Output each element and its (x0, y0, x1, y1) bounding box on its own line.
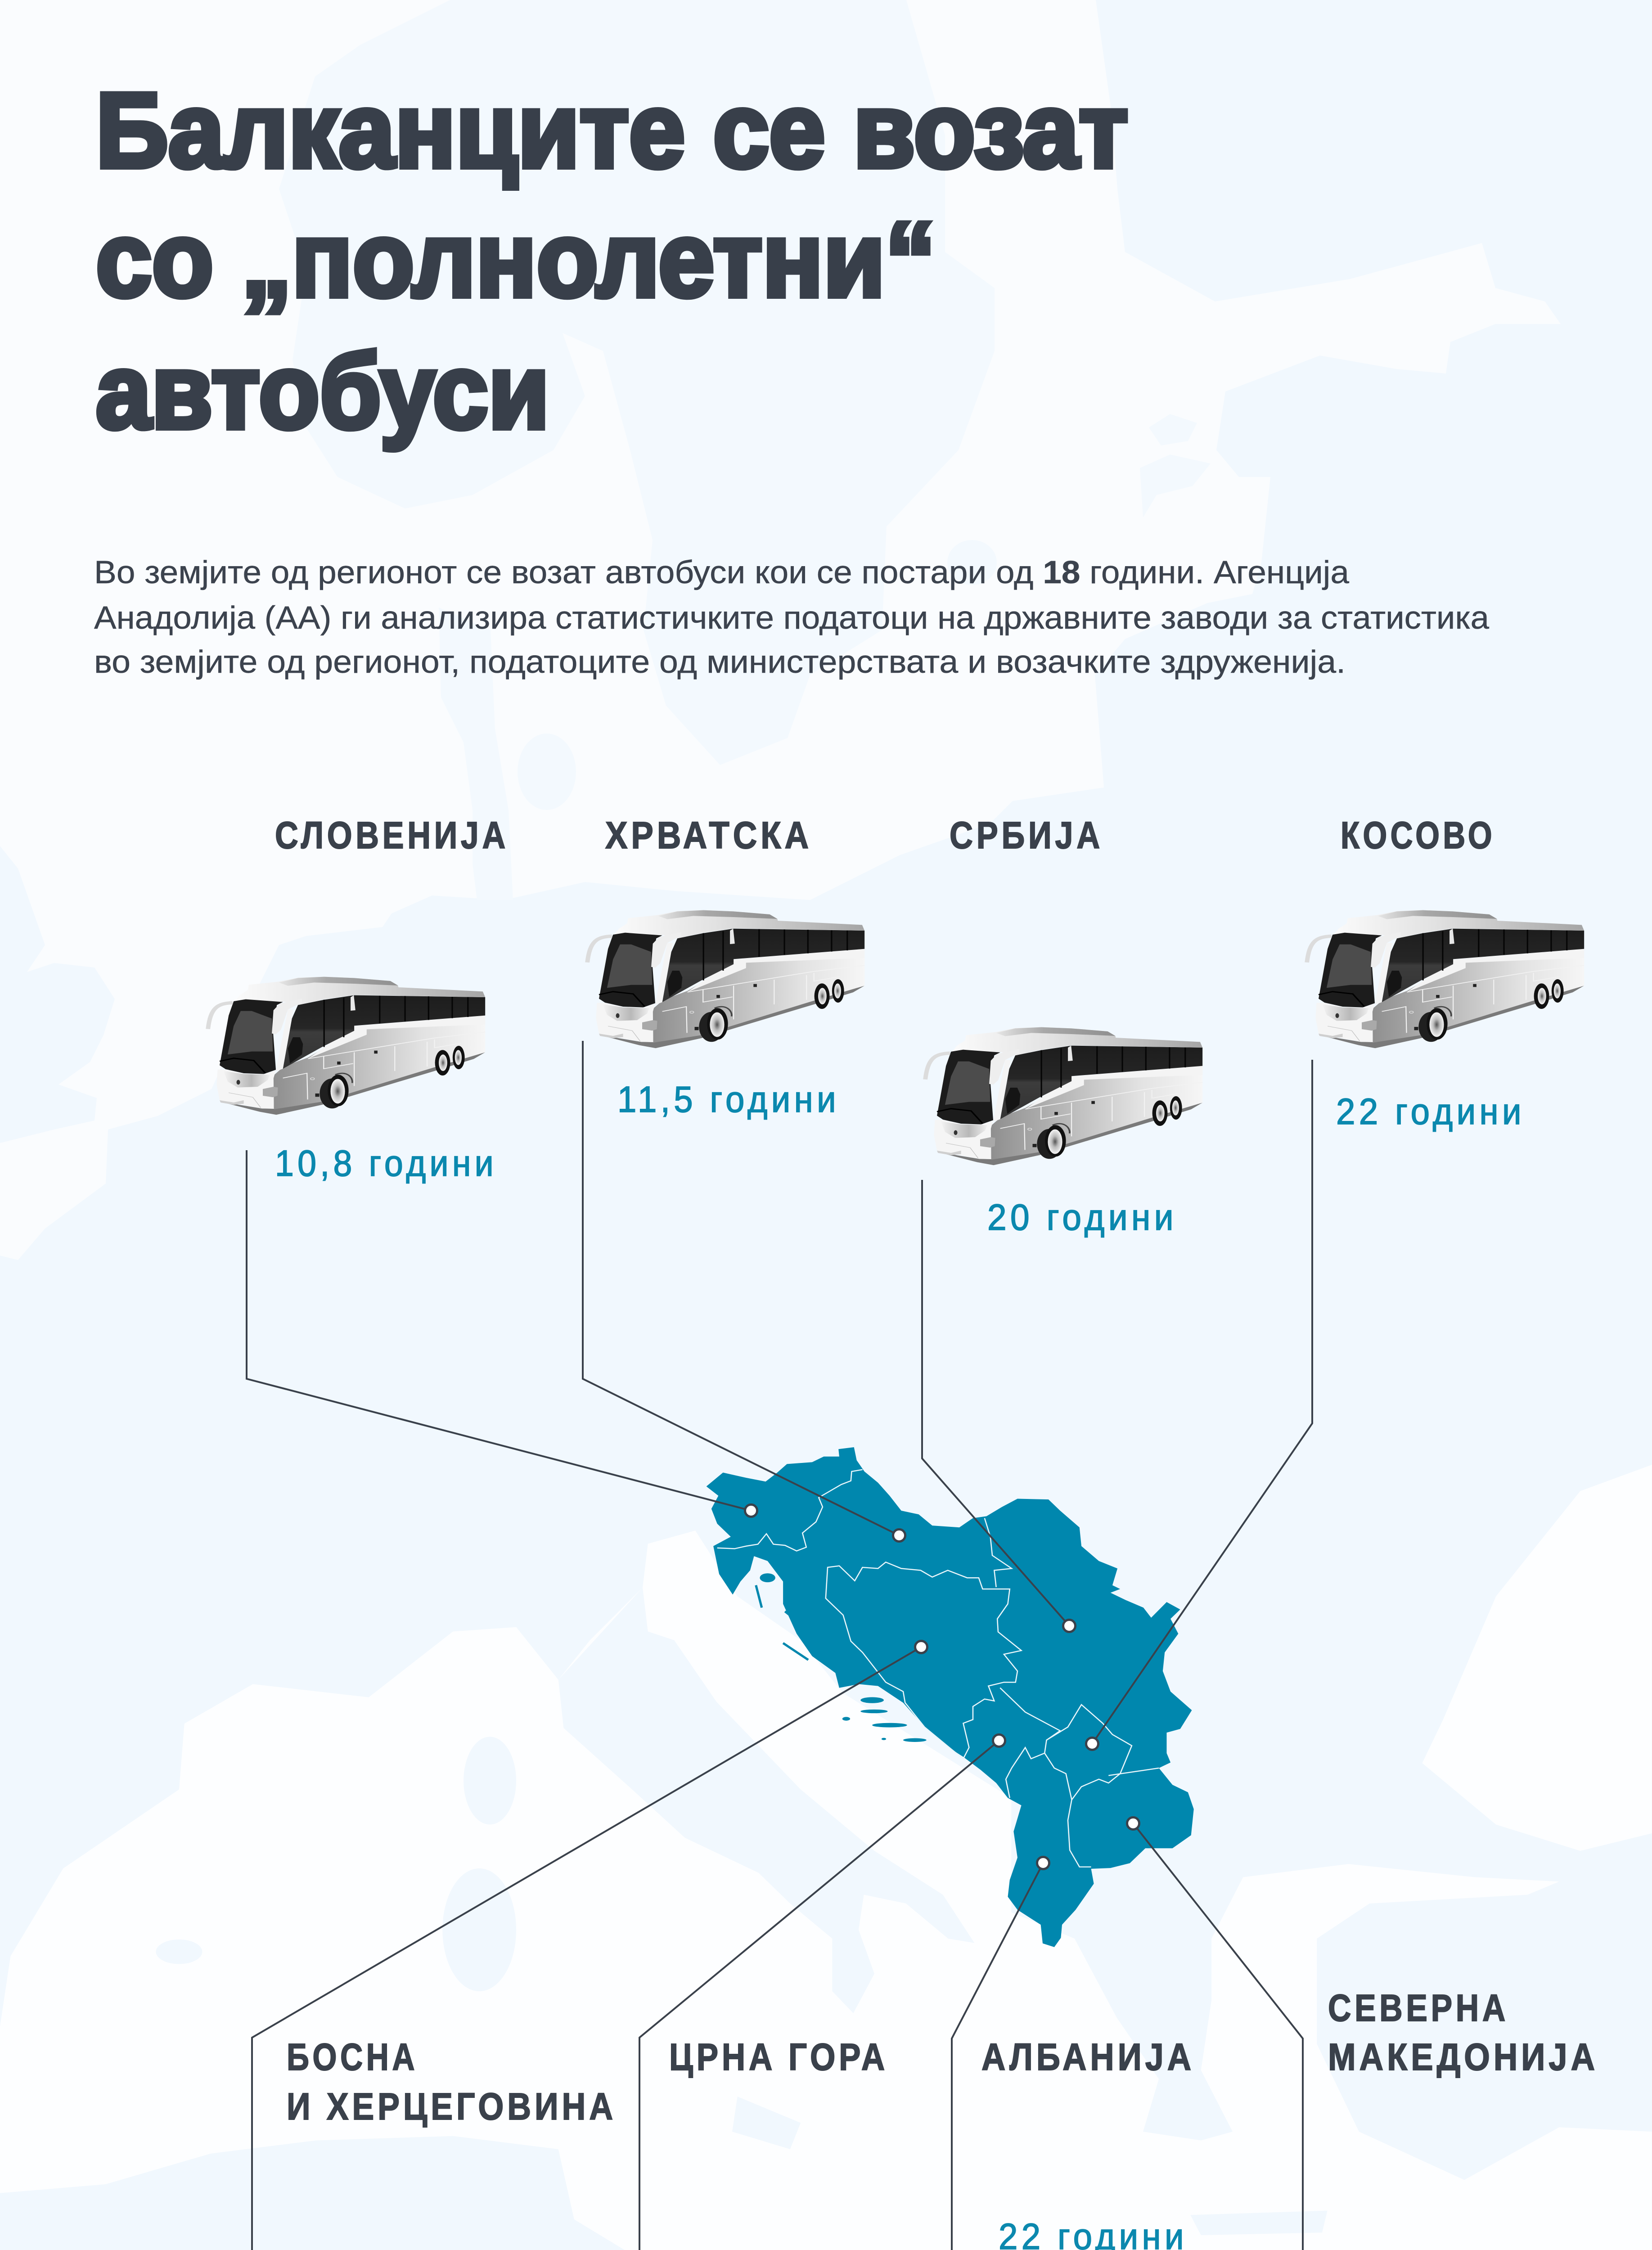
panel: Serbia: СРБИЈА (950, 814, 1103, 856)
map pins (745, 1505, 1139, 1869)
intro text: Анадолија (АА) ги анализира статистичките податоци на државните заводи за статистика (94, 600, 1490, 636)
panel: Bosnia and Herzegovina (133, 2036, 617, 2250)
panel: Croatia: ХРВАТСКА (605, 814, 812, 856)
panel: Bosnia and Herzegovina: И ХЕРЦЕГОВИНА (287, 2085, 617, 2128)
panel: Croatia: 11,5 години (617, 1079, 840, 1120)
intro text: во земјите од регионот, податоците од министерствата и возачките здруженија. (94, 644, 1346, 680)
title (96, 71, 1128, 451)
panel: Slovenia (208, 814, 509, 1184)
panel: Slovenia: СЛОВЕНИЈА (275, 814, 509, 856)
title: со „полнолетни“ (96, 200, 936, 319)
panel: North Macedonia (1314, 1987, 1598, 2250)
panel: Montenegro: ЦРНА ГОРА (669, 2036, 888, 2078)
leader lines (247, 1041, 1312, 2250)
panel: Kosovo: 22 години (1336, 1091, 1525, 1132)
panel: Croatia (587, 814, 864, 1120)
panel: North Macedonia: МАКЕДОНИЈА (1328, 2036, 1598, 2078)
map: Western Balkans (707, 1447, 1194, 1947)
panel: Kosovo: КОСОВО (1341, 814, 1495, 856)
panel: Slovenia: 10,8 години (275, 1143, 497, 1184)
panel: Albania (912, 2036, 1195, 2250)
title: автобуси (96, 332, 549, 451)
panel: Kosovo (1307, 814, 1584, 1132)
panel: Serbia (925, 814, 1202, 1238)
panel: North Macedonia: СЕВЕРНА (1328, 1987, 1509, 2029)
intro text (94, 555, 1490, 680)
title: Балканците се возат (96, 71, 1128, 190)
panel: Albania: АЛБАНИЈА (981, 2036, 1195, 2078)
intro text: Во земјите од регионот се возат автобуси кои се постари од 18 години. Агенција (94, 555, 1350, 590)
panel: Bosnia and Herzegovina: БОСНА (287, 2036, 418, 2078)
panel: Serbia: 20 години (987, 1197, 1177, 1238)
